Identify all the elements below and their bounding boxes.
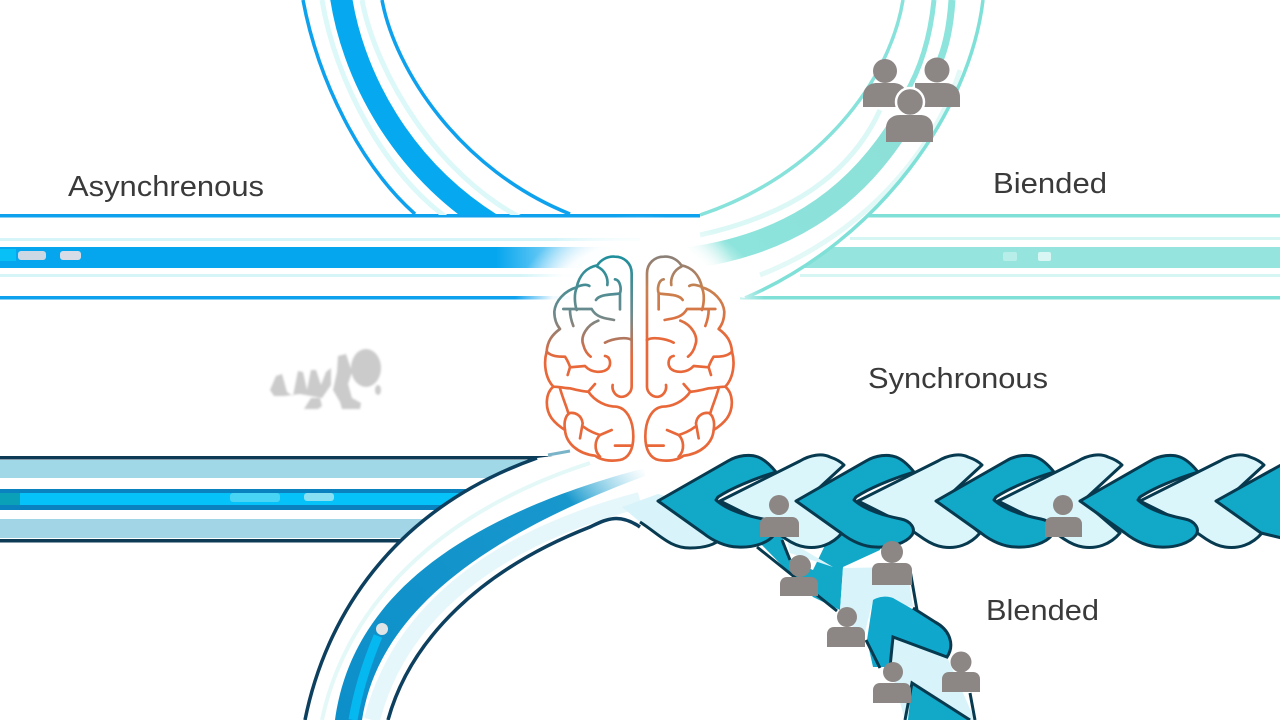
lower arc: dark blue strands: [305, 445, 645, 720]
label: Synchronous: Synchronous: [868, 363, 1048, 395]
icon: person on branch 5: [942, 652, 980, 692]
icon: person on branch 4: [873, 662, 911, 703]
icon: person on braid 1: [760, 495, 799, 537]
upper right pathway: blended horizontal track: [740, 214, 1280, 300]
person back left: [863, 59, 907, 107]
icon: person on braid 2: [1045, 495, 1082, 537]
horizontal braid: [658, 455, 1280, 547]
icon: person on branch 3: [827, 607, 865, 647]
icon: person on branch 2: [872, 541, 912, 585]
icon: brain: [545, 257, 734, 461]
label: Asynchrenous: Asynchrenous: [68, 171, 264, 203]
person front: [886, 88, 933, 142]
upper left pathway: asynchronous horizontal track: [0, 214, 710, 300]
lower left pathway: synchronous horizontal track: [0, 456, 560, 542]
person back right: [915, 58, 960, 107]
top arc: teal strands: [690, 0, 983, 298]
label: Biended: Biended: [993, 168, 1107, 200]
top arc: blue strands: [303, 0, 570, 235]
icon: group of three people: [863, 58, 960, 142]
icon: person on branch 1: [780, 555, 818, 596]
brain left hemisphere: [545, 257, 633, 461]
icon: blurred grey figures: [270, 349, 381, 409]
center glow: [515, 215, 765, 395]
brain right hemisphere: [645, 257, 734, 461]
label: Blended: Blended: [986, 595, 1099, 627]
lower right branch: braid descending: [757, 530, 975, 720]
braid lead-in strand: [622, 494, 722, 548]
